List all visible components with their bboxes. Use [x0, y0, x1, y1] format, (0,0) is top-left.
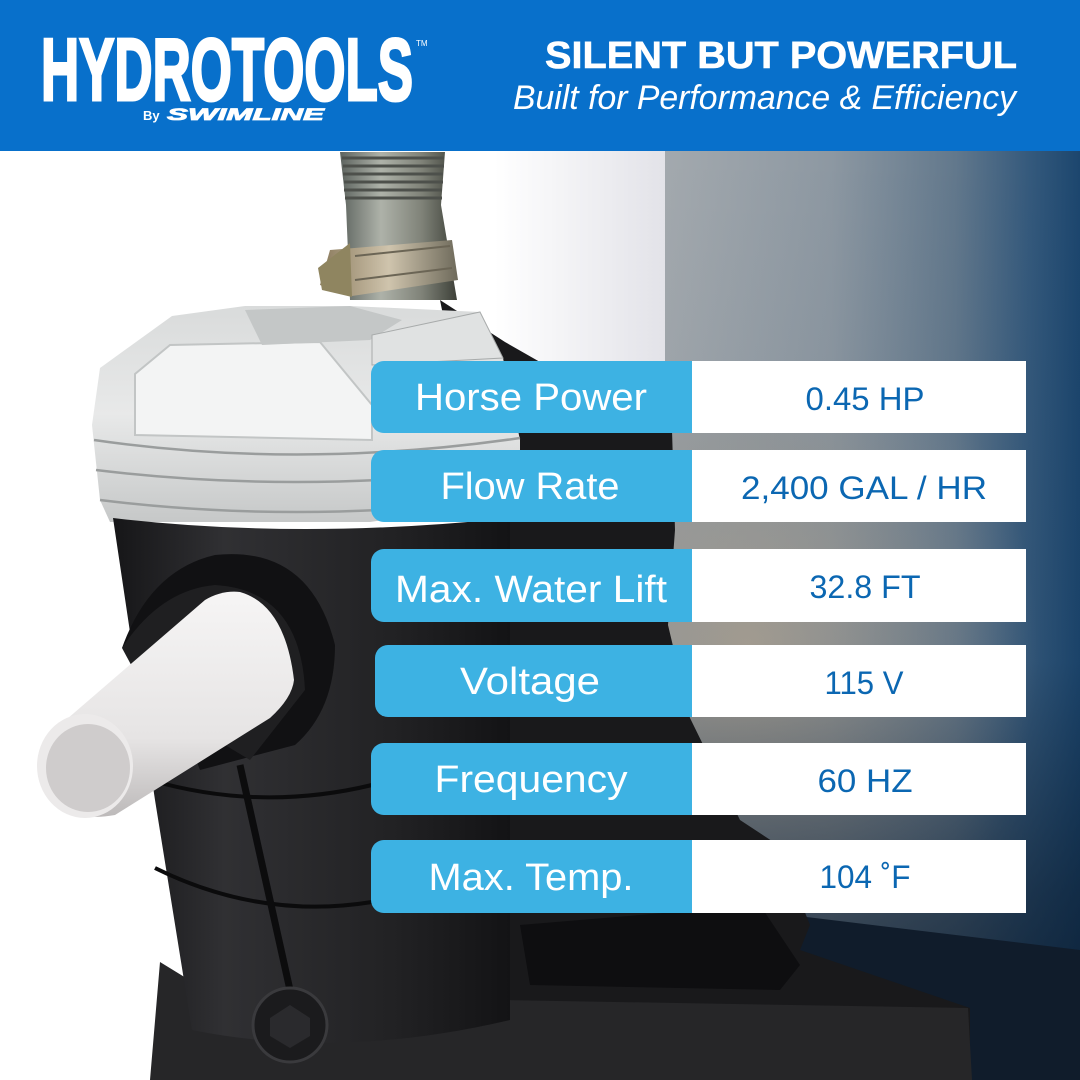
photo: black strainer body: [113, 518, 510, 1043]
row: max temp: Max. Temp.: [428, 857, 634, 899]
spec table: [371, 361, 1026, 913]
headline: SILENT BUT POWERFUL: [545, 35, 1017, 77]
row: horse power: 0.45 HP: [806, 381, 924, 417]
row: voltage: Voltage: [460, 661, 600, 703]
brand logo: [41, 20, 428, 124]
row: frequency: [371, 743, 1026, 815]
subheadline: Built for Performance & Efficiency: [513, 79, 1018, 117]
photo: hose port collar: [122, 554, 335, 770]
brand logo: SWIMLINE: [167, 105, 325, 124]
row: max temp: 104 ˚F: [820, 859, 910, 895]
brand logo: By: [143, 108, 160, 123]
row: frequency: 60 HZ: [818, 763, 912, 799]
row: horse power: Horse Power: [415, 377, 647, 419]
brand logo: HYDROTOOLS: [41, 20, 413, 119]
row: flow rate: [371, 450, 1026, 522]
photo: pump base: [150, 962, 972, 1080]
photo: drain plug: [253, 988, 327, 1062]
brand logo: TM: [416, 39, 428, 48]
photo: pump rear housing: [440, 300, 970, 1080]
row: voltage: [375, 645, 1026, 717]
row: max water lift: Max. Water Lift: [395, 569, 667, 611]
row: max water lift: [371, 549, 1026, 622]
photo: white hose connector: [37, 592, 294, 818]
row: max water lift: 32.8 FT: [810, 569, 920, 605]
row: frequency: Frequency: [434, 759, 628, 801]
row: horse power: [371, 361, 1026, 433]
row: max temp: [371, 840, 1026, 913]
photo: threaded hose fitting and clamp: [318, 152, 458, 300]
row: voltage: 115 V: [824, 665, 904, 701]
photo: clear strainer lid: [92, 306, 520, 522]
row: flow rate: 2,400 GAL / HR: [741, 470, 987, 506]
header banner: [0, 0, 1080, 151]
row: flow rate: Flow Rate: [440, 466, 620, 508]
